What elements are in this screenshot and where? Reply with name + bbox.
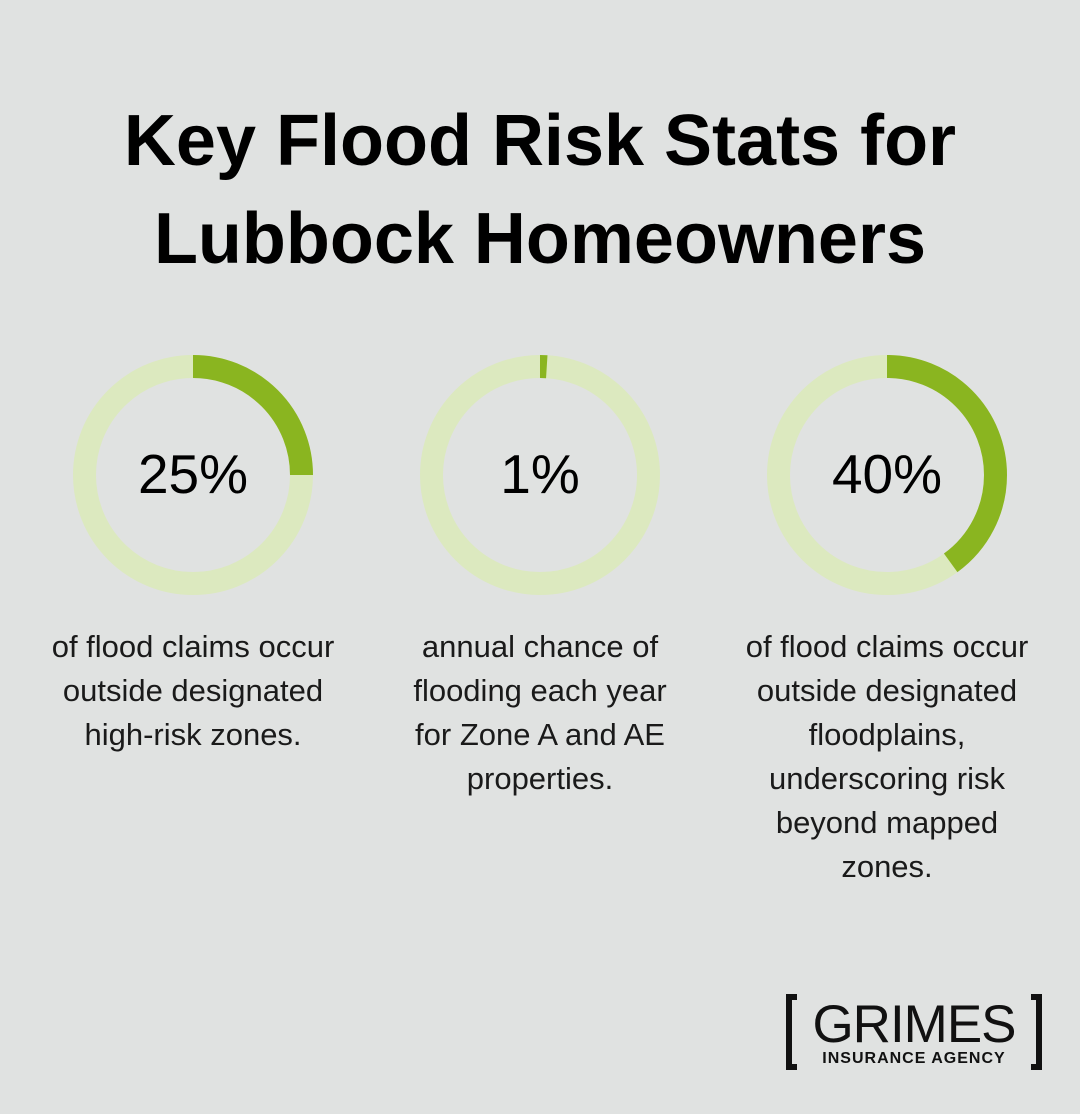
- donut: 25%: 25%: [138, 443, 248, 505]
- text: stat 3 description: floodplains,: [809, 717, 965, 752]
- text: stat 2 description: annual chance of: [422, 629, 658, 664]
- text: stat 3 description: zones.: [841, 849, 933, 884]
- title: Key Flood Risk Stats for: [124, 101, 956, 181]
- text: stat 1 description: high-risk zones.: [84, 717, 302, 752]
- logo: Grimes Insurance Agency: GRIMES: [812, 995, 1016, 1054]
- text: stat 3 description: of flood claims occur: [746, 629, 1028, 664]
- text: stat 1 description: of flood claims occur: [52, 629, 334, 664]
- donut: 40%: 40%: [832, 443, 942, 505]
- donut charts: [73, 355, 1007, 595]
- text: stat 3 description: underscoring risk: [769, 761, 1005, 796]
- text: stat 3 description: beyond mapped: [776, 805, 998, 840]
- donut: 1%: 1%: [500, 443, 580, 505]
- donut: 40%: [778, 366, 996, 584]
- text: stat 2 description: flooding each year: [413, 673, 667, 708]
- text: stat 3 description: [746, 629, 1028, 884]
- text: stat 3 description: outside designated: [757, 673, 1017, 708]
- logo: Grimes Insurance Agency: [786, 994, 1042, 1070]
- logo: Grimes Insurance Agency: INSURANCE AGENCY: [822, 1050, 1006, 1067]
- text: stat 1 description: outside designated: [63, 673, 323, 708]
- text: stat 2 description: for Zone A and AE: [415, 717, 665, 752]
- text: stat 1 description: [52, 629, 334, 752]
- text: stat 2 description: properties.: [467, 761, 613, 796]
- text: stat 2 description: [413, 629, 667, 796]
- donut: 1%: [432, 366, 648, 584]
- title: Lubbock Homeowners: [154, 199, 926, 279]
- donut: 25%: [84, 366, 302, 584]
- title: [124, 101, 956, 279]
